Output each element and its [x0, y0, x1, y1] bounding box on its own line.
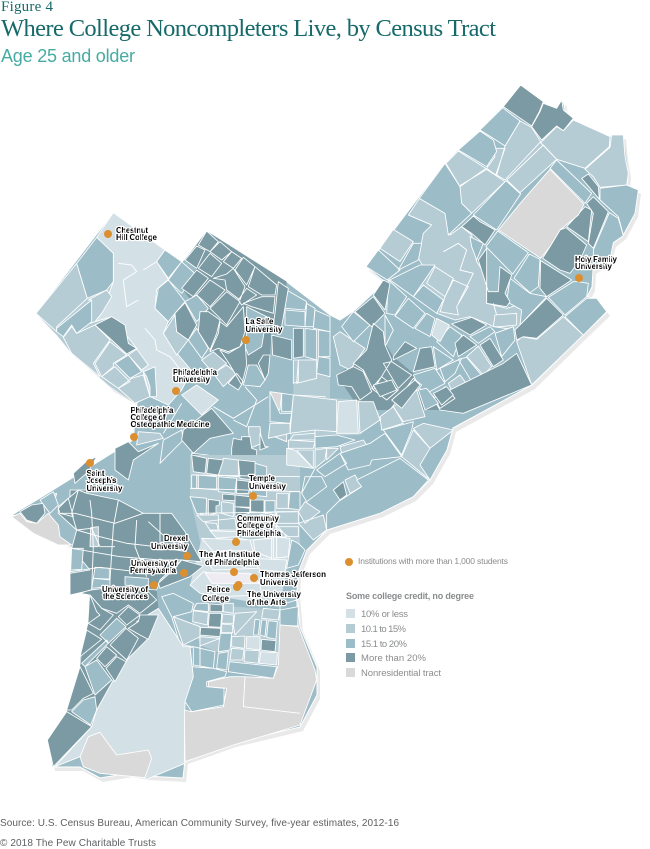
institution: Philadelphia College of Osteopathic Medicine — [130, 406, 210, 441]
institution: Peirce College: College — [202, 594, 230, 603]
institution: The Art Institute of Philadelphia — [199, 550, 261, 576]
institution: Holy Family University: University — [575, 262, 613, 271]
institution: Temple University: University — [249, 482, 287, 491]
institution labels and dots — [86, 226, 618, 607]
institution: La Salle University: La Salle — [246, 317, 274, 326]
institution: The University of the Arts: The University — [247, 590, 302, 599]
legend item: Nonresidential tract: Nonresidential tract — [361, 668, 441, 679]
institution: Thomas Jefferson University: University — [260, 578, 299, 587]
central and river ward tracts — [190, 380, 453, 627]
institution: Drexel University: University — [151, 542, 189, 551]
institution: University of Pennsylvania: Pennsylvania — [130, 566, 177, 575]
map: census tracts of Philadelphia — [12, 85, 638, 780]
legend: institution dot: Institutions with more than 1,000 students — [358, 556, 508, 566]
institution: Drexel University — [151, 534, 191, 560]
institution: Philadelphia University — [172, 368, 218, 395]
institution: La Salle University: University — [246, 325, 283, 334]
institution: Chestnut Hill College — [104, 226, 158, 242]
legend item: More than 20%: More than 20% — [361, 653, 427, 664]
institution: Saint Joseph's University: Joseph's — [86, 476, 117, 485]
legend heading: Some college credit, no degree — [346, 591, 474, 601]
legend item: 10.1 to 15%: 10.1 to 15% — [361, 624, 407, 635]
legend item: 15.1 to 20%: 15.1 to 20% — [361, 639, 408, 650]
northeast tracts — [333, 85, 638, 413]
institution: Holy Family University: Holy Family — [575, 255, 618, 264]
institution: Philadelphia University: Philadelphia — [173, 368, 218, 377]
institution: University of the Sciences: University of — [102, 585, 148, 594]
copyright note: © 2018 The Pew Charitable Trusts — [0, 838, 156, 849]
institution: The Art Institute of Philadelphia: of Philadelphia — [205, 558, 260, 567]
institution: Holy Family University — [575, 255, 618, 282]
institution: Thomas Jefferson University: Thomas Jefferson — [260, 570, 326, 579]
institution: Thomas Jefferson University — [250, 570, 326, 587]
institution: Drexel University: Drexel — [164, 534, 188, 543]
institution: Philadelphia College of Osteopathic Medicine: Osteopathic Medicine — [130, 420, 210, 429]
institution: Temple University — [249, 474, 287, 500]
title: Where College Noncompleters Live, by Census Tract — [1, 15, 496, 42]
city base shape — [12, 85, 638, 778]
source note: Source: U.S. Census Bureau, American Community Survey, five-year estimates, 2012-16 — [0, 818, 399, 829]
institution: Saint Joseph's University: Saint — [86, 469, 105, 478]
northwest tracts — [36, 213, 330, 500]
institution: Community College of Philadelphia: Community — [237, 514, 280, 523]
institution: University of Pennsylvania: University of — [131, 559, 177, 568]
institution: University of the Sciences — [102, 581, 158, 601]
subtitle: Age 25 and older — [1, 46, 135, 66]
institution: Community College of Philadelphia: Philadelphia — [237, 529, 282, 538]
institution: The University of the Arts — [234, 581, 302, 607]
institution: University of Pennsylvania — [130, 559, 188, 577]
institution: Chestnut Hill College: Hill College — [116, 233, 158, 242]
institution: Philadelphia College of Osteopathic Medicine: Philadelphia — [130, 406, 174, 415]
institution: Chestnut Hill College: Chestnut — [116, 226, 148, 235]
institution: University of the Sciences: the Sciences — [103, 592, 149, 601]
institution: Community College of Philadelphia: College of — [237, 521, 273, 530]
map shadow — [15, 89, 641, 782]
institution: Community College of Philadelphia — [232, 514, 282, 546]
institution: Peirce College: Peirce — [207, 585, 231, 594]
legend item: 10% or less: 10% or less — [361, 609, 408, 620]
institution: Philadelphia University: University — [173, 375, 211, 384]
west and south Philadelphia tracts — [12, 490, 317, 780]
institution: La Salle University — [242, 317, 283, 344]
institution: Temple University: Temple — [249, 474, 276, 483]
legend — [345, 556, 508, 679]
institution: Saint Joseph's University — [86, 459, 123, 493]
institution: Peirce College — [202, 583, 241, 603]
institution: The University of the Arts: of the Arts — [247, 598, 287, 607]
institution: The Art Institute of Philadelphia: The Art Institute — [199, 550, 261, 559]
institution: Saint Joseph's University: University — [86, 484, 123, 493]
institution: Philadelphia College of Osteopathic Medicine: College of — [130, 413, 166, 422]
